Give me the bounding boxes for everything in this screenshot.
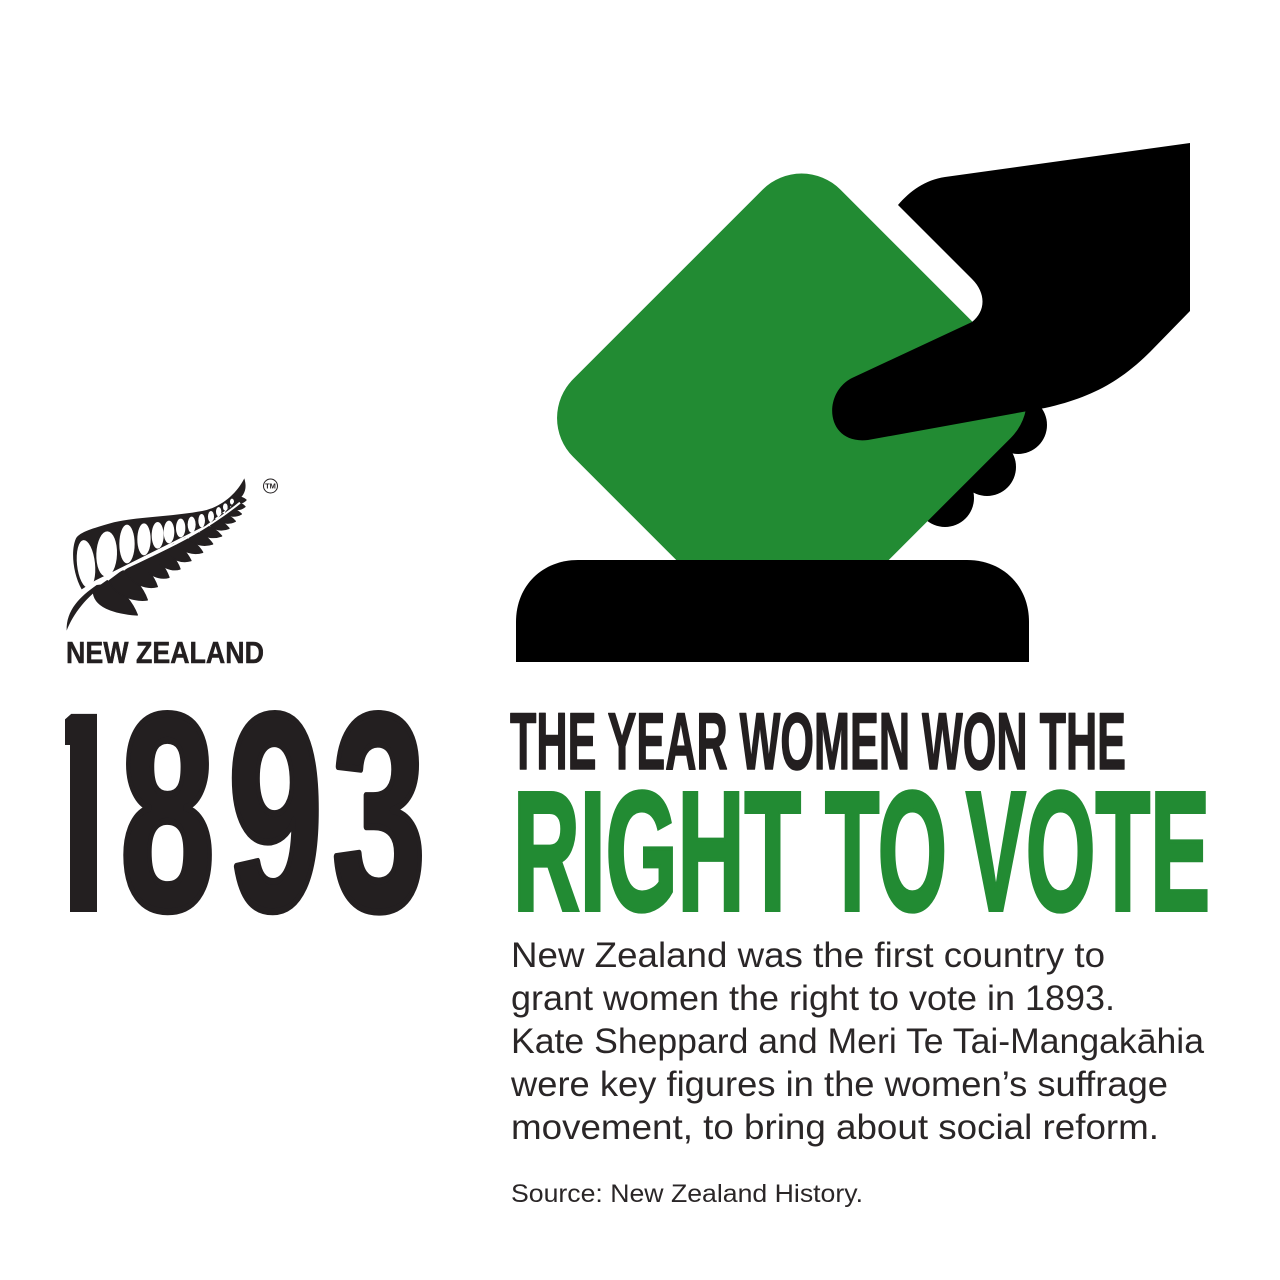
icon: ballot box: [516, 560, 1029, 662]
big year 1893: 9: [228, 657, 323, 969]
logo: New Zealand fern: [66, 478, 278, 670]
body text: Kate Sheppard and Meri Te Tai-Mangakāhia: [511, 1022, 1205, 1061]
big year 1893: 8: [120, 657, 215, 969]
body text: New Zealand was the first country to: [511, 936, 1105, 975]
heading: [510, 697, 1210, 947]
icon: knuckles of hand: [916, 396, 1047, 527]
big year 1893: 1: [21, 652, 137, 974]
big year 1893: 3: [332, 657, 426, 969]
heading line: right to vote: RIGHT: [513, 757, 801, 947]
body text: [510, 936, 1205, 1147]
icon: hand: [832, 143, 1190, 440]
heading line: right to vote: TO: [825, 757, 947, 947]
body text: grant women the right to vote in 1893.: [511, 979, 1115, 1018]
icon: silver fern: [67, 478, 246, 631]
source note: Source: New Zealand History.: [511, 1180, 863, 1208]
icon: trademark symbol: [264, 479, 278, 493]
logo wordmark: NEW ZEALAND: [66, 635, 264, 670]
icon: trademark symbol: TM: [265, 482, 276, 491]
icon: green ballot paper: [534, 151, 1050, 666]
icon: hand placing ballot into box: [516, 143, 1190, 666]
body text: movement, to bring about social reform.: [511, 1108, 1159, 1147]
big year 1893: [65, 710, 422, 916]
body text: were key figures in the women’s suffrage: [510, 1065, 1168, 1104]
